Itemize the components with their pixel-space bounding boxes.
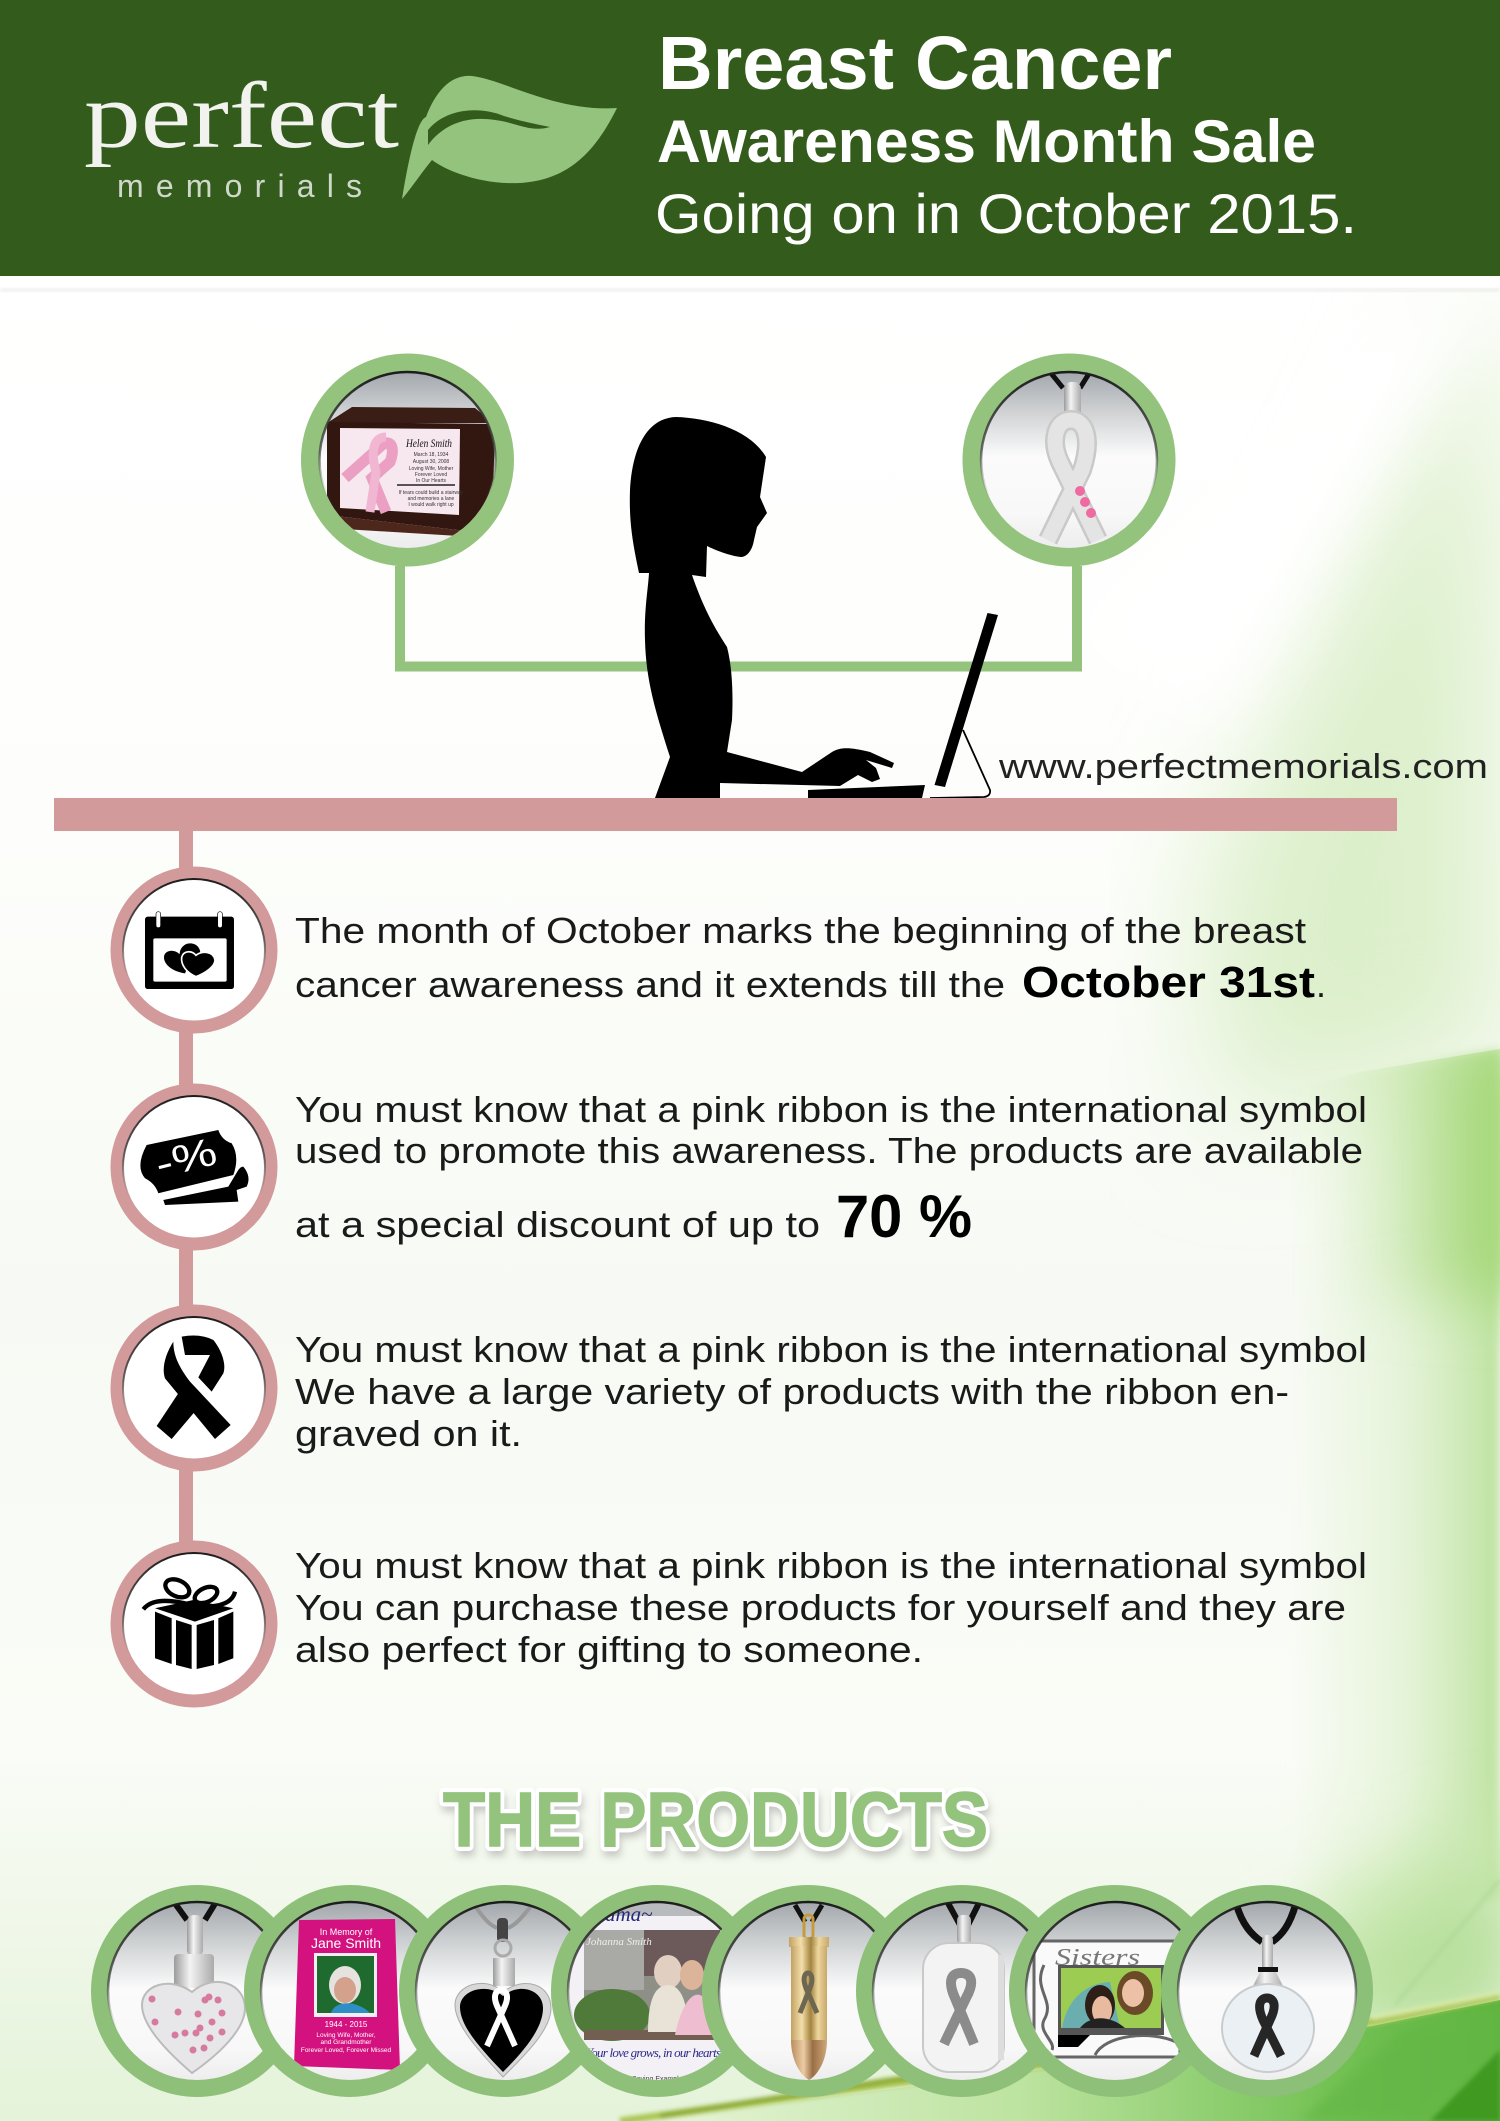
product 2: pink memorial card: Forever Loved, Forever Missed xyxy=(301,2047,392,2054)
timeline icon: calendar with hearts xyxy=(117,873,271,1027)
title xyxy=(655,21,1357,245)
text block: engraved ribbon: We have a large variety of products with the ribbon en- xyxy=(295,1371,1289,1412)
text block: pink ribbon discount: at a special discount of up to xyxy=(295,1204,820,1245)
product circle: ribbon keepsake box: March 18, 1934 xyxy=(414,452,449,458)
product row xyxy=(100,1894,1364,2088)
logo: perfect memorials xyxy=(84,64,617,204)
product 4: memorial photo print: Saving Example xyxy=(632,2076,683,2083)
title: Going on in October 2015. xyxy=(655,182,1357,245)
product 3: black heart pendant with white ribbon xyxy=(408,1894,602,2088)
product circle: ribbon keepsake box: In Our Hearts xyxy=(416,478,447,484)
product 2: pink memorial card: and Grandmother xyxy=(321,2039,372,2046)
product 2: pink memorial card: Loving Wife, Mother, xyxy=(316,2032,376,2039)
product circle: ribbon keepsake box: Loving Wife, Mother xyxy=(409,466,454,472)
header band xyxy=(0,0,1500,292)
timeline icon: gift box xyxy=(117,1547,271,1701)
connector between product circles xyxy=(400,566,1077,666)
product 7: sisters photo frame xyxy=(1018,1894,1212,2088)
timeline connector xyxy=(179,831,193,1551)
product 2: pink memorial card: 1944 - 2015 xyxy=(325,2020,368,2029)
text block: gifting: also perfect for gifting to someone. xyxy=(295,1629,923,1670)
timeline icon: discount tickets: -% xyxy=(151,1129,221,1187)
product 4: memorial photo print: ama~ xyxy=(605,1902,653,1926)
text block: pink ribbon discount: You must know that a pink ribbon is the international symbol xyxy=(295,1089,1367,1130)
text block: engraved ribbon: graved on it. xyxy=(295,1413,522,1454)
text block: October: The month of October marks the beginning of the breast xyxy=(295,910,1306,951)
product 5: gold bullet pendant xyxy=(711,1894,905,2088)
pink desk bar xyxy=(54,798,1397,831)
title: Breast Cancer xyxy=(658,21,1172,105)
text block: October: . xyxy=(1316,964,1326,1005)
text block: pink ribbon discount: 70 % xyxy=(836,1183,972,1250)
heading: the products: THE PRODUCTS xyxy=(443,1777,988,1863)
text block: gifting: You can purchase these products for yourself and they are xyxy=(295,1587,1346,1628)
text block: pink ribbon discount xyxy=(295,1089,1367,1250)
product 2: pink memorial card: In Memory of xyxy=(320,1927,373,1937)
product 7: sisters photo frame: Sisters xyxy=(1055,1945,1140,1971)
product 4: memorial photo print: Johanna Smith xyxy=(586,1936,652,1948)
product 1: pink crystal heart pendant xyxy=(100,1894,294,2088)
product circle: ribbon keepsake box: If tears could build a stairway xyxy=(399,490,464,496)
product circle: ribbon keepsake box: August 30, 2008 xyxy=(413,459,449,465)
text block: pink ribbon discount: used to promote this awareness. The products are available xyxy=(295,1130,1363,1171)
product circle: ribbon pendant xyxy=(972,363,1166,557)
text block: October: cancer awareness and it extends till the xyxy=(295,964,1005,1005)
text block: October xyxy=(295,910,1326,1007)
product 6: silver dog tag pendant xyxy=(865,1894,1059,2088)
timeline icon: discount tickets xyxy=(117,1090,271,1244)
logo: perfect memorials: memorials xyxy=(117,168,367,204)
product 8: glass ribbon pendant xyxy=(1170,1894,1364,2088)
product 4: memorial photo print xyxy=(560,1894,754,2088)
text block: October: October 31st xyxy=(1022,958,1315,1007)
product circle: ribbon keepsake box: I would walk right up xyxy=(408,502,454,508)
woman at laptop silhouette xyxy=(630,417,998,798)
text block: gifting xyxy=(295,1545,1367,1670)
text block: gifting: You must know that a pink ribbon is the international symbol xyxy=(295,1545,1367,1586)
product circle: ribbon keepsake box: Forever Loved xyxy=(415,472,447,478)
product circle: ribbon keepsake box: Helen Smith xyxy=(405,436,452,450)
text block: engraved ribbon xyxy=(295,1329,1367,1454)
text block: engraved ribbon: You must know that a pink ribbon is the international symbol xyxy=(295,1329,1367,1370)
website url: www.perfectmemorials.com xyxy=(998,748,1488,786)
timeline icon: awareness ribbon xyxy=(117,1311,271,1465)
heading: the products: THE PRODUCTS xyxy=(443,1777,988,1863)
logo: perfect memorials: perfect xyxy=(84,64,399,168)
heading: the products: THE PRODUCTS xyxy=(445,1783,990,1869)
title: Awareness Month Sale xyxy=(657,108,1316,175)
product 2: pink memorial card: Jane Smith xyxy=(311,1935,381,1951)
product 2: pink memorial card xyxy=(253,1894,447,2088)
product circle: ribbon keepsake box: and memories a lane xyxy=(408,496,455,502)
product 4: memorial photo print: Your love grows, in our hearts xyxy=(586,2045,721,2060)
product circle: ribbon keepsake box xyxy=(310,363,504,557)
